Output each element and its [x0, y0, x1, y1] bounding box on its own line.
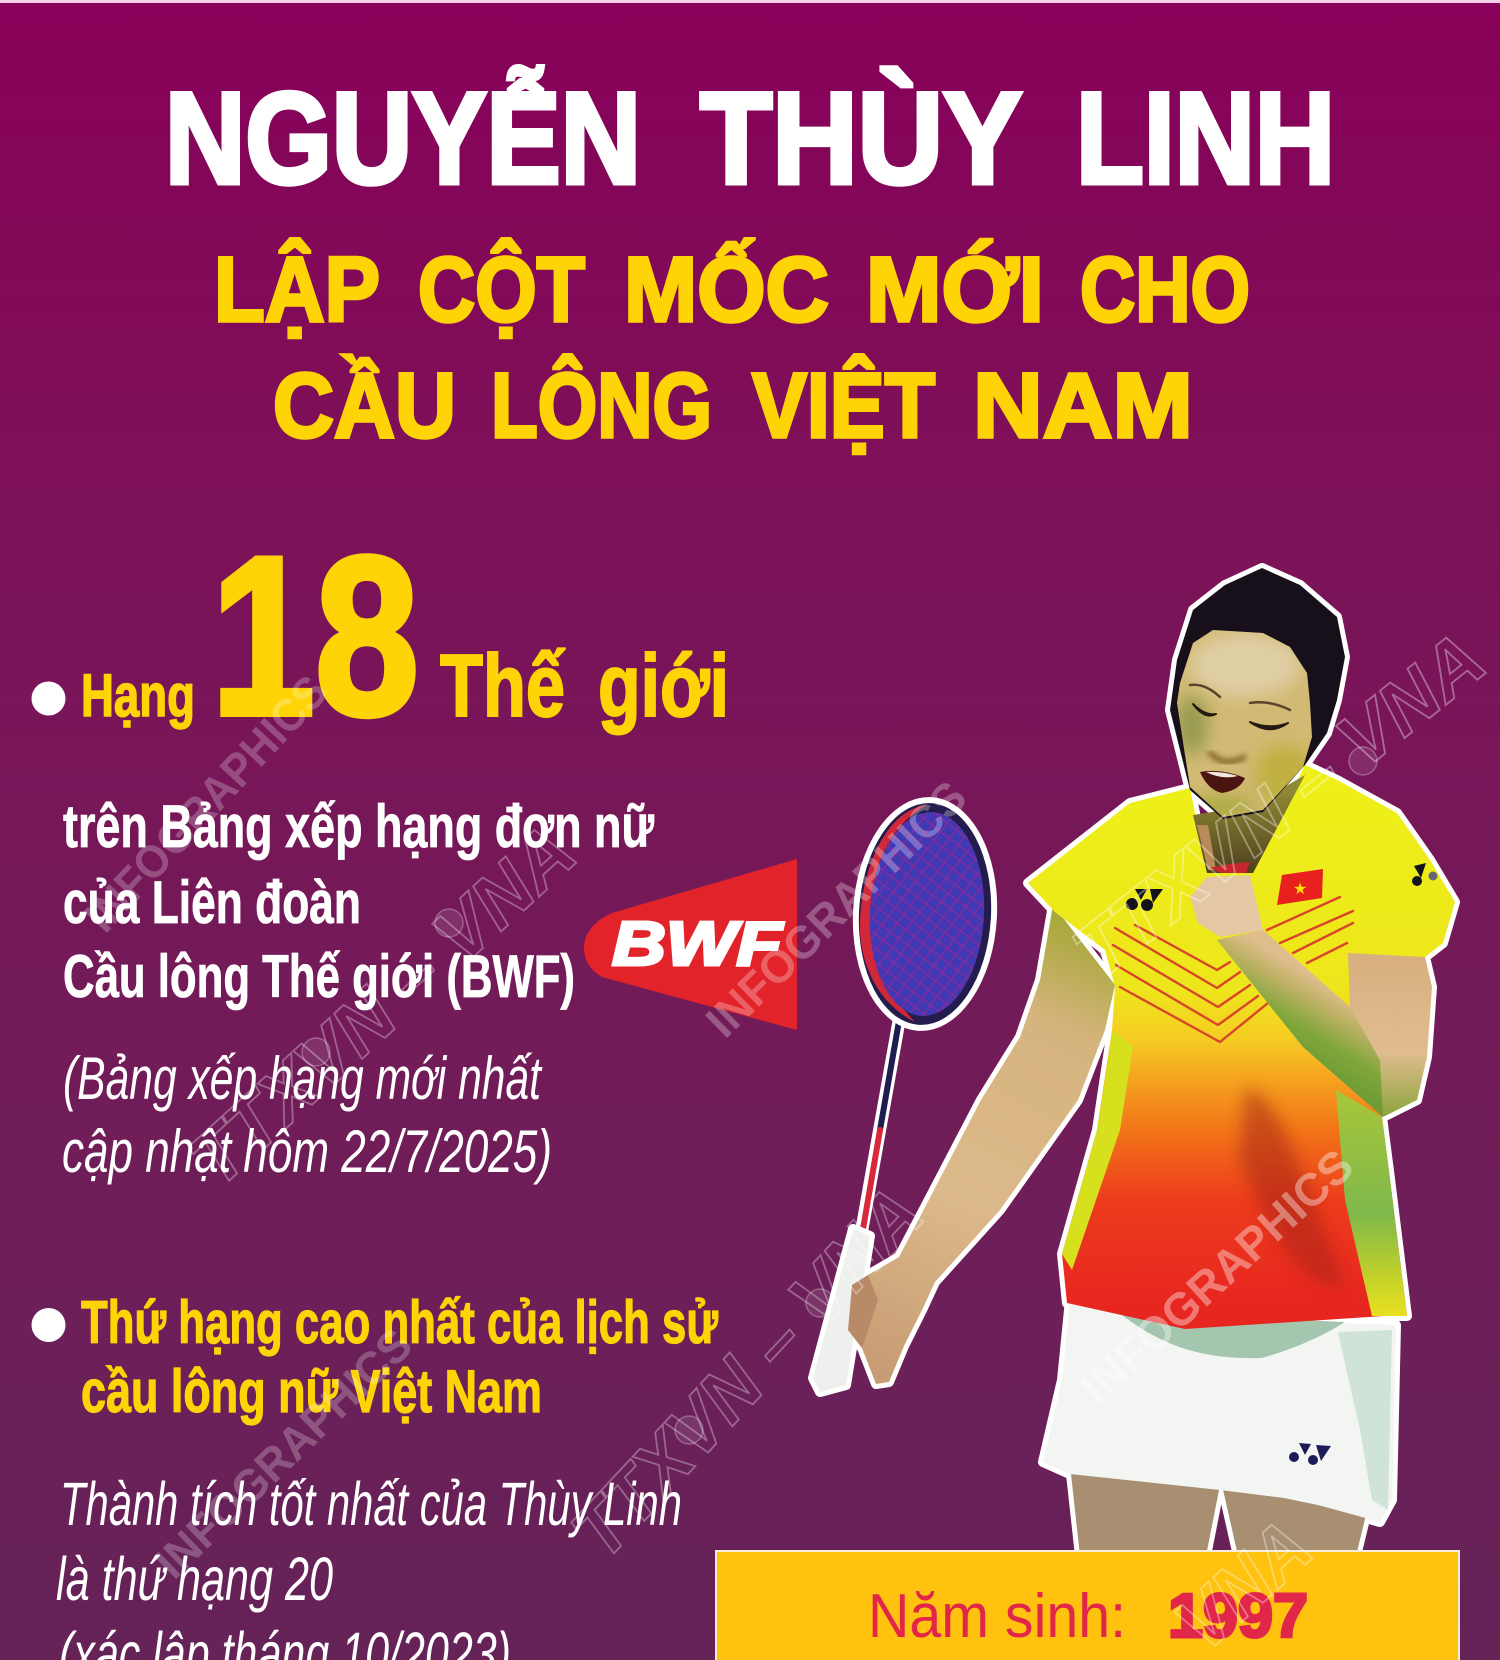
shirt side panel right [1336, 1090, 1407, 1316]
subtitle line 1: LẬP [214, 238, 380, 341]
left arm and hand [848, 905, 1115, 1384]
shirt [1028, 765, 1455, 1329]
highlight line 1: Thứ hạng cao nhất của lịch sử [81, 1289, 718, 1356]
birth label: Năm sinh: [868, 1582, 1126, 1651]
player illustration [813, 568, 1455, 1556]
bullet [32, 1308, 66, 1342]
watermark: infographics 2: INFOGRAPHICS [696, 771, 976, 1047]
head [1170, 568, 1345, 822]
description line 2: của Liên đoàn [63, 869, 361, 936]
fist [1190, 875, 1263, 937]
eye right [1250, 722, 1288, 729]
right leg [1222, 1485, 1366, 1556]
highlight line 2: cầu lông nữ Việt Nam [81, 1358, 542, 1425]
subtitle line 1: CHO [1080, 239, 1250, 341]
racket [847, 793, 1003, 1240]
subtitle line 1: CỘT [418, 238, 585, 341]
shuttle shape [584, 859, 797, 1030]
watermark: agency mark 1: TTXVN – VNA [173, 809, 592, 1203]
label: Thế giới: Thế [440, 636, 566, 735]
watermark: infographics 1: INFOGRAPHICS [74, 665, 337, 942]
eyebrow right [1250, 702, 1290, 710]
bullet [32, 682, 66, 716]
sponsor logo: skirt [1289, 1443, 1331, 1465]
shirt chevrons [1113, 897, 1353, 1042]
shirt shading [1062, 1030, 1407, 1316]
racket grip [813, 1229, 870, 1392]
right arm [1217, 930, 1432, 1117]
achievement line 1: Thành tích tốt nhất của Thùy Linh [60, 1470, 682, 1538]
fingers over grip [848, 1275, 878, 1348]
description line 1: trên Bảng xếp hạng đơn nữ [63, 793, 654, 860]
racket head [847, 793, 1003, 1035]
description line 3: Cầu lông Thế giới (BWF) [63, 943, 575, 1010]
subtitle line 1 [214, 238, 1250, 341]
skirt shade [1338, 1330, 1392, 1510]
subtitle line 2: LÔNG [491, 354, 712, 457]
forearm [1217, 930, 1383, 1117]
legs [1070, 1465, 1366, 1556]
label: Hạng: Hạng [81, 662, 195, 729]
achievement line 2: là thứ hạng 20 [56, 1545, 333, 1613]
subtitle line 2: NAM [973, 355, 1193, 457]
panel background [716, 1551, 1459, 1660]
watermark: infographics 3: INFOGRAPHICS [1070, 1139, 1363, 1413]
flag star: ★ [1293, 881, 1307, 898]
birth year value: 1997 [1168, 1582, 1308, 1651]
sponsor logo: chest [1126, 889, 1163, 911]
section: ranking 18 [32, 509, 729, 762]
flag on shirt [1277, 869, 1323, 905]
title word: Nguyễn: NGUYỄN [165, 65, 641, 211]
midriff [1118, 1312, 1345, 1358]
section: highest ranking [32, 1289, 718, 1425]
panel: birth year [716, 1551, 1459, 1660]
sponsor logo: sleeve [1412, 863, 1438, 886]
italic note: ranking date [62, 1045, 552, 1185]
watermark: agency mark 3: TTXVN – VNA [555, 1171, 939, 1575]
eye left [1193, 704, 1216, 716]
title word: Thùy: THÙY [700, 65, 1022, 211]
shirt dark folds [1240, 1090, 1345, 1286]
flag field [1277, 869, 1323, 905]
italic note: best achievement [56, 1470, 682, 1660]
title word: Linh: LINH [1076, 65, 1335, 211]
left leg [1070, 1465, 1220, 1556]
subtitle line 1: MỚI [866, 238, 1044, 341]
watermarks [74, 616, 1500, 1660]
shirt side panel left [1062, 1030, 1133, 1270]
skirt [1043, 1300, 1396, 1522]
neck highlight [1197, 825, 1216, 870]
watermark globes [302, 747, 1377, 1444]
nose [1210, 753, 1244, 762]
big number 18: 18 [211, 509, 419, 762]
mouth [1200, 771, 1245, 793]
label: Thế giới: giới [598, 636, 729, 735]
icon: BWF logo [584, 859, 797, 1030]
subtitle line 2 [273, 354, 1193, 457]
racket shaft [860, 1021, 899, 1240]
face [1177, 630, 1312, 817]
neck [1193, 775, 1305, 873]
eyebrow left [1190, 685, 1220, 697]
ranking description [63, 793, 654, 1010]
subtitle line 2: VIỆT [752, 354, 935, 457]
subtitle [214, 238, 1250, 457]
white cut-out outline [813, 568, 1455, 1556]
note line 2: cập nhật hôm 22/7/2025) [62, 1118, 552, 1185]
subtitle line 2: CẦU [273, 354, 456, 457]
watermark: agency mark 2: TTXVN – VNA [1057, 616, 1500, 995]
watermark: infographics 4: INFOGRAPHICS [145, 1318, 422, 1588]
collar shadow [1209, 862, 1250, 873]
note line 1: (Bảng xếp hạng mới nhất [63, 1045, 543, 1112]
title [165, 65, 1335, 211]
BWF wordmark: BWF [612, 910, 785, 979]
hair [1170, 568, 1345, 819]
label: Thế giới [440, 636, 729, 735]
subtitle line 1: MỐC [624, 238, 829, 341]
